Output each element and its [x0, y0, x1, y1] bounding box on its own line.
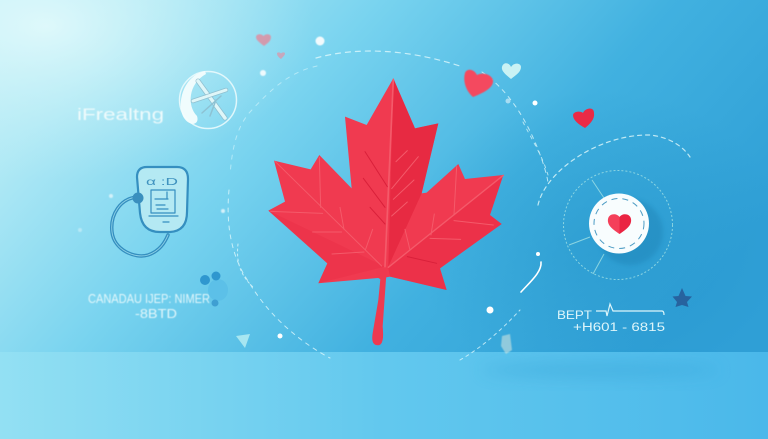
leaf stem	[372, 268, 387, 345]
leaf shaded facets	[388, 78, 438, 267]
badge disc	[589, 194, 649, 254]
badge shadow	[597, 199, 663, 265]
icon: health monitor device	[112, 167, 188, 256]
icon: plane in circle	[180, 71, 236, 128]
dashed orbit and white swoosh, right	[521, 122, 690, 292]
label: Canadian text	[88, 291, 210, 321]
maple leaf	[268, 78, 503, 345]
label: right readout text	[557, 304, 665, 334]
floor band	[0, 352, 768, 439]
icon: small blue figure	[200, 272, 228, 306]
leaf body	[268, 78, 503, 290]
heart badge	[564, 170, 672, 280]
device cable loop	[112, 197, 168, 256]
label: Canadian text: CANADAU IJEP: NIMER	[88, 291, 210, 306]
label: upper left text: iFrealtng	[77, 105, 164, 124]
floating white dots	[78, 36, 540, 338]
icon: glossy red heart right	[573, 108, 594, 128]
icon: pale crystal on floor	[501, 334, 512, 354]
icon: pale heart upper left	[256, 34, 271, 46]
icon: red heart	[464, 70, 493, 97]
label: right readout text: +H601 - 6815	[573, 322, 665, 334]
badge target ring	[564, 170, 672, 280]
leaf veins	[271, 79, 503, 267]
device body	[137, 167, 188, 232]
dashed orbit around leaf	[228, 51, 548, 360]
label: Canadian text: -8BTD	[135, 306, 177, 321]
badge stitching	[594, 198, 644, 248]
small floating hearts	[256, 34, 594, 128]
icon: badge heart	[608, 214, 631, 234]
device connector	[132, 192, 144, 204]
icon: small pale gem	[236, 334, 250, 348]
icon: pale blue heart	[502, 63, 521, 79]
label: right readout text: BEPT	[557, 310, 592, 322]
device display text: α :D	[146, 177, 178, 188]
device screen	[149, 190, 178, 222]
icon: navy star	[672, 288, 692, 307]
icon: pulse line	[596, 304, 664, 316]
icon: tiny pale heart	[277, 52, 285, 59]
